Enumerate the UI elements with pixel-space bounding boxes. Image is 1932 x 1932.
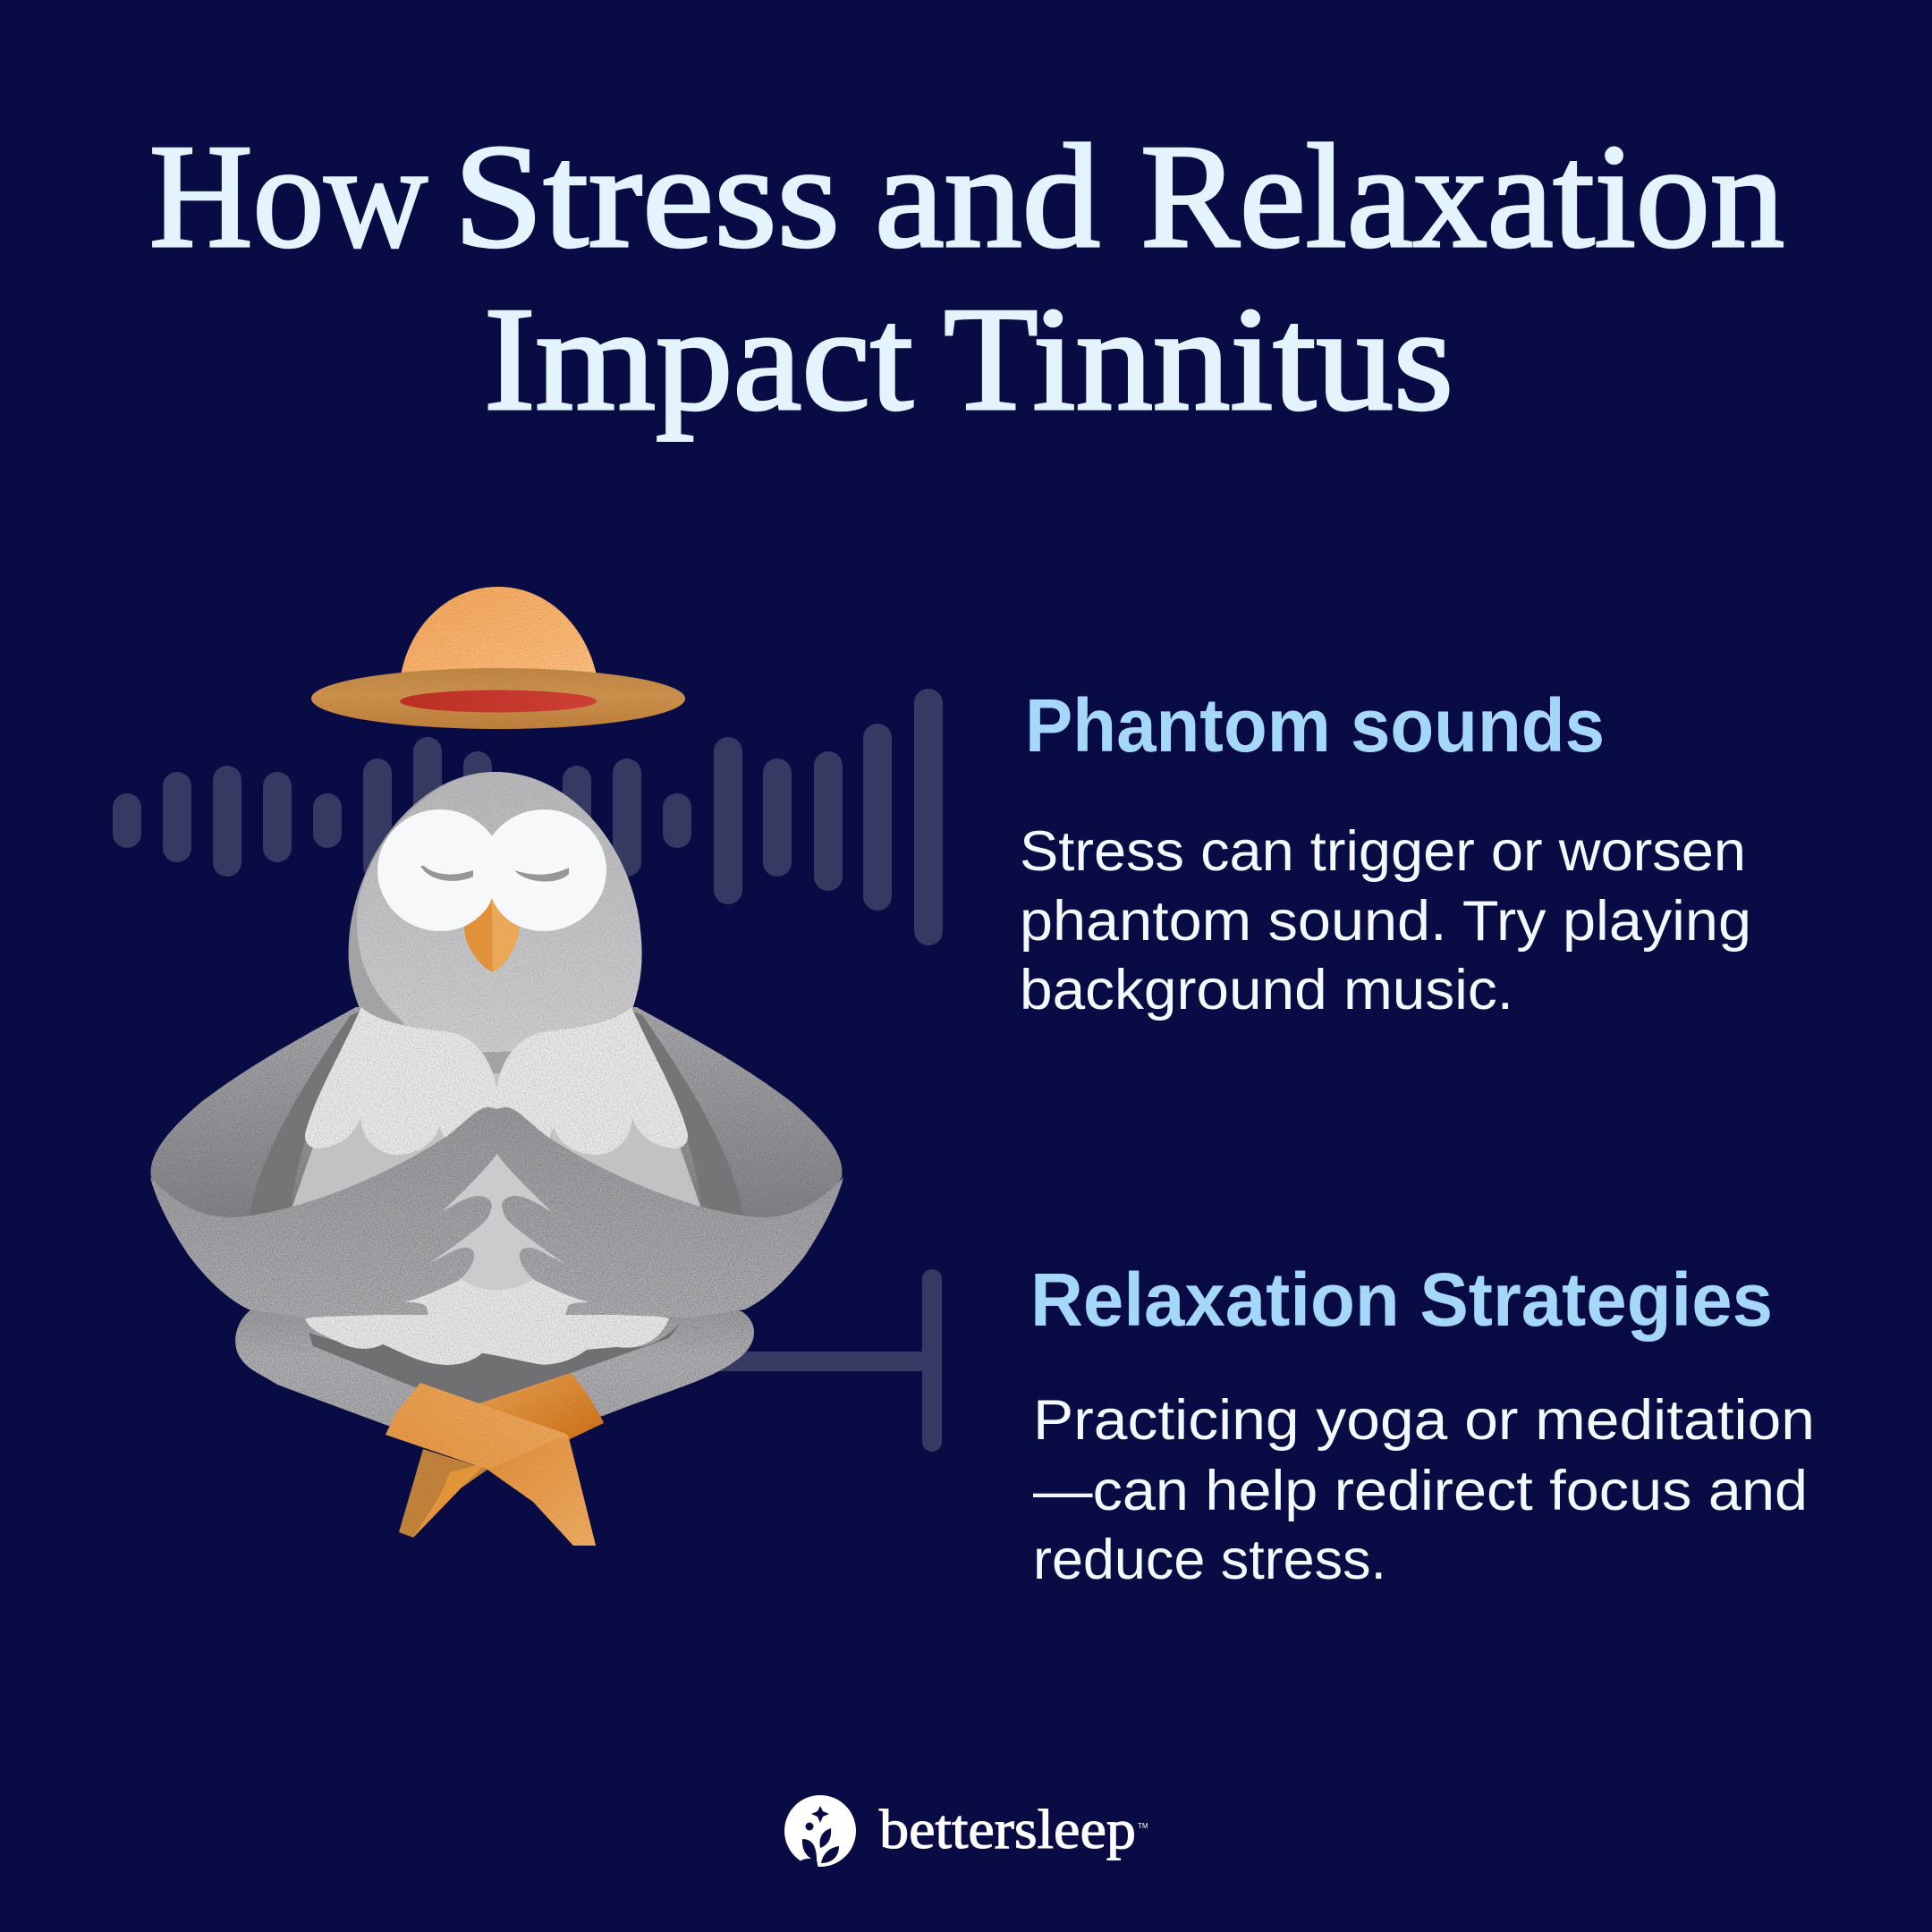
owl feet <box>386 1373 604 1546</box>
icon: logo mark <box>784 1795 856 1869</box>
owl beak <box>464 898 520 972</box>
text: phantom sounds body: phantom sound. Try playing <box>1020 890 1751 953</box>
near leg <box>386 1383 596 1546</box>
title: and <box>875 114 1100 278</box>
text: phantom sounds body: background music. <box>1020 959 1513 1021</box>
owl chest feathers <box>305 1007 688 1155</box>
owl lower belly feathers <box>305 1274 669 1365</box>
heading: relaxation strategies: Relaxation Strategies <box>1030 1258 1773 1342</box>
text: relaxation strategies body: Practicing yoga or meditation <box>1033 1389 1815 1452</box>
text: phantom sounds body: Stress can trigger or worsen <box>1020 820 1746 883</box>
text: relaxation strategies body <box>1033 1389 1815 1591</box>
owl closed eyes <box>420 866 569 882</box>
owl wing shadows <box>249 1011 744 1218</box>
title: Impact <box>484 276 913 441</box>
owl legs <box>235 1288 754 1431</box>
title: Relaxation <box>1140 114 1784 278</box>
text: phantom sounds body <box>1020 820 1751 1021</box>
hat band <box>400 691 597 712</box>
owl belly <box>438 1136 555 1292</box>
hat brim <box>311 668 685 729</box>
owl head <box>349 772 642 1073</box>
sound wave bars <box>113 689 943 945</box>
far foot upper <box>479 1373 604 1440</box>
far leg lower <box>399 1449 487 1538</box>
logo <box>784 1795 1148 1869</box>
owl eye patches <box>377 809 606 931</box>
owl left arm <box>150 1107 497 1318</box>
wordmark: bettersleep <box>879 1800 1136 1860</box>
owl back wings <box>151 1007 842 1270</box>
hat crown <box>401 587 597 675</box>
title: Stress <box>453 114 840 278</box>
illustration: meditating owl <box>150 772 843 1546</box>
icon: hat <box>311 587 685 729</box>
owl crotch shadow <box>309 1322 682 1403</box>
text: relaxation strategies body: —can help redirect focus and <box>1033 1460 1808 1522</box>
heading: phantom sounds: Phantom sounds <box>1025 683 1605 767</box>
text: relaxation strategies body: reduce stress. <box>1033 1529 1386 1591</box>
title: Tinnitus <box>944 276 1453 441</box>
owl torso <box>289 1007 704 1315</box>
connector bar <box>716 1269 942 1452</box>
title: How <box>149 114 428 278</box>
trademark: TM <box>1138 1822 1148 1830</box>
owl right arm <box>496 1107 843 1318</box>
title <box>149 114 1784 441</box>
